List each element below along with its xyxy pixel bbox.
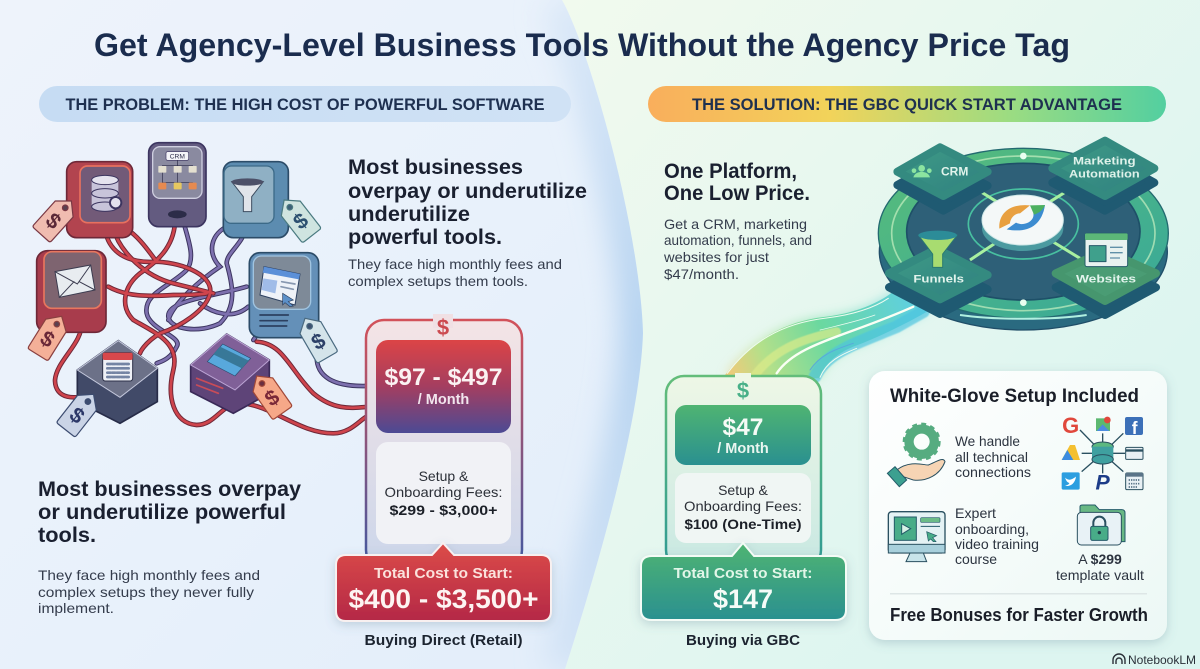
text: template vault (1056, 551, 1144, 583)
module: marketing automation: Automation (1069, 169, 1140, 181)
total cost callout: Total Cost to Start: (374, 566, 513, 582)
text: onboarding and training: onboarding, (955, 521, 1029, 537)
icon: connected apps: G (1062, 413, 1079, 438)
text block: upper problem statement: They face high monthly fees and (348, 256, 562, 272)
module: CRM: CRM (941, 165, 968, 179)
icon: connected apps: f (1132, 418, 1138, 438)
text: onboarding and training: video training (955, 536, 1039, 552)
setup fee box: Setup & (718, 482, 769, 498)
icon: price tag: $ (307, 327, 330, 355)
icon: dollar sign (735, 373, 751, 403)
text block: upper problem statement: underutilize (348, 203, 470, 226)
total cost callout: $400 - $3,500+ (348, 584, 538, 614)
monthly price box (675, 405, 811, 465)
red wires (55, 215, 366, 433)
total cost callout (336, 543, 551, 621)
icon: database box (67, 162, 133, 238)
monthly price box: $97 - $497 (384, 364, 502, 391)
icon: price tag (247, 369, 292, 420)
icon: funnel box (223, 162, 288, 238)
text block: one platform (663, 160, 812, 282)
arrow: data stream to GBC pricing (725, 290, 930, 378)
text: template vault: template vault (1056, 567, 1144, 583)
illustration: tangled software tools (28, 143, 366, 437)
setup fee box: $100 (One-Time) (684, 516, 802, 532)
text block: lower problem statement: tools. (38, 524, 96, 547)
icon: connected apps (1062, 413, 1143, 495)
text block: one platform: One Low Price. (664, 182, 810, 205)
text block: lower problem statement: They face high monthly fees and (38, 567, 260, 583)
module: marketing automation: Marketing (1073, 156, 1136, 168)
module: websites (1056, 233, 1156, 315)
icon: price tag (32, 193, 80, 243)
text block: lower problem statement: implement. (38, 600, 114, 616)
module: marketing automation (1052, 141, 1154, 211)
icon: price tag (275, 193, 321, 243)
text block: upper problem statement: Most businesses (348, 156, 523, 179)
total cost callout: Total Cost to Start: (674, 566, 812, 582)
icon: price tag: $ (41, 207, 66, 234)
text: technical connections: all technical (955, 449, 1028, 465)
heading: the problem (39, 86, 571, 122)
setup fee box (376, 442, 511, 544)
text block: upper problem statement: powerful tools. (348, 226, 502, 249)
text: onboarding and training (955, 505, 1039, 567)
icons: setup graphics (887, 413, 1143, 562)
hub ring (878, 148, 1168, 330)
illustration: platform hub (878, 141, 1168, 330)
icon: dollar sign (433, 314, 453, 340)
text block: one platform: automation, funnels, and (664, 232, 812, 248)
monthly price box: $47 (723, 414, 763, 441)
monthly price box (376, 340, 511, 433)
icon: connected apps: P (1096, 471, 1111, 495)
icon: credit card box (191, 334, 269, 413)
label: buying direct: Buying Direct (Retail) (364, 633, 523, 649)
text block: lower problem statement (38, 478, 301, 616)
icon: gear and hand (887, 425, 945, 487)
monthly price box: / Month (418, 392, 469, 408)
panel: white-glove setup (869, 371, 1167, 640)
icon: price tag (56, 387, 103, 437)
heading: the solution: THE SOLUTION: THE GBC QUICK START ADVANTAGE (692, 96, 1122, 114)
text block: lower problem statement: or underutilize powerful (38, 501, 286, 524)
icon: price tag: $ (260, 384, 284, 411)
icon: price tag: $ (36, 325, 59, 353)
text: template vault: A $299 (1078, 551, 1122, 567)
setup fee box: Setup & (419, 468, 469, 484)
module: funnels (889, 231, 988, 314)
icon: locked template folder (1077, 505, 1125, 545)
text block: upper problem statement (348, 156, 587, 289)
purple wires (146, 215, 366, 386)
heading: the solution (648, 86, 1166, 122)
text block: one platform: Get a CRM, marketing (664, 216, 807, 232)
panel: buying via GBC pricing card (641, 373, 846, 620)
text block: one platform: websites for just (663, 249, 769, 265)
icon: CRM box (149, 143, 206, 227)
setup fee box: Onboarding Fees: (684, 498, 802, 514)
text block: one platform: One Platform, (664, 160, 797, 183)
module: CRM (897, 147, 988, 211)
icon: email box (37, 251, 106, 332)
text block: lower problem statement: Most businesses overpay (38, 478, 301, 501)
NotebookLM badge: NotebookLM (1128, 653, 1196, 667)
text: technical connections (955, 433, 1031, 480)
hub center logo (982, 195, 1063, 251)
icon: dollar sign: $ (437, 315, 449, 340)
setup fee box (675, 473, 811, 543)
icon: price tag (28, 310, 72, 361)
text block: upper problem statement: complex setups them tools. (348, 273, 528, 289)
icon: dollar sign: $ (737, 378, 749, 403)
text block: one platform: $47/month. (664, 266, 739, 282)
title: Get Agency-Level Business Tools Without the Agency Price Tag (94, 27, 1070, 63)
module: funnels: Funnels (913, 273, 964, 285)
icon: calendar box (77, 341, 157, 423)
background: problem side (0, 0, 660, 669)
setup fee box: Onboarding Fees: (384, 484, 502, 500)
icon: CRM box: CRM (170, 153, 185, 160)
icon: price tag (295, 312, 338, 363)
heading: the problem: THE PROBLEM: THE HIGH COST OF POWERFUL SOFTWARE (66, 96, 544, 114)
text: onboarding and training: Expert (955, 505, 996, 521)
monthly price box: / Month (717, 441, 769, 457)
text block: upper problem statement: overpay or underutilize (348, 180, 587, 203)
total cost callout (641, 543, 846, 620)
text block: lower problem statement: complex setups they never fully (38, 584, 254, 600)
setup fee box: $299 - $3,000+ (390, 502, 498, 518)
icon: price tag: $ (288, 207, 313, 234)
text: free bonuses: Free Bonuses for Faster Growth (890, 605, 1148, 625)
heading: white-glove setup: White-Glove Setup Included (890, 386, 1139, 407)
icon: browser box (249, 253, 319, 338)
icon: training monitor (888, 512, 945, 562)
text: technical connections: We handle (955, 433, 1020, 449)
text: onboarding and training: course (955, 551, 997, 567)
module: websites: Websites (1076, 273, 1136, 285)
label: buying via GBC: Buying via GBC (686, 633, 801, 649)
icon: price tag: $ (65, 402, 90, 429)
panel: buying direct pricing card (336, 314, 551, 621)
text: technical connections: connections (955, 464, 1031, 480)
total cost callout: $147 (713, 584, 773, 614)
